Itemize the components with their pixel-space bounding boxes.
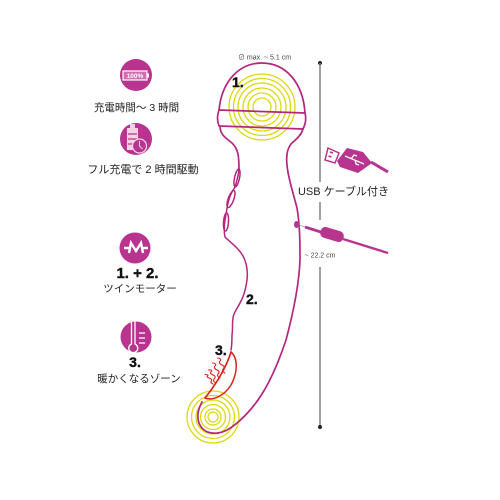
label: 1: 1.: [232, 74, 244, 90]
text: motor numbers: 1. + 2.: [116, 265, 159, 282]
label: 3: 3.: [215, 342, 227, 358]
text: twin motor: ツインモーター: [103, 283, 177, 295]
coils: head: [229, 74, 295, 140]
text: charging time: 充電時間～ 3 時間: [94, 102, 179, 114]
text: warming zone: 暖かくなるゾーン: [97, 372, 181, 385]
text: diameter: ⊘ max. ~ 5.1 cm: [238, 54, 291, 62]
device outline: [198, 63, 306, 433]
cable with plug: [305, 226, 388, 253]
warming zone: [205, 352, 236, 399]
icon: thermometer: [120, 321, 152, 353]
text: usb cable: USB ケーブル付き: [298, 184, 389, 198]
icon: twin motor: [120, 232, 150, 264]
icon: battery with clock: [120, 123, 152, 155]
icon: battery 100%: 100%: [127, 73, 144, 80]
icon: battery 100%: [120, 59, 152, 91]
text: full charge runtime: フル充電で 2 時間駆動: [87, 162, 199, 176]
usb plug and cable: [325, 148, 388, 173]
text: zone number: 3.: [129, 354, 141, 370]
dimension line: [318, 61, 322, 429]
charging port: [294, 221, 305, 228]
coils: base: [187, 391, 239, 443]
text: length: ~ 22.2 cm: [305, 252, 336, 260]
label: 2: 2.: [246, 291, 258, 307]
